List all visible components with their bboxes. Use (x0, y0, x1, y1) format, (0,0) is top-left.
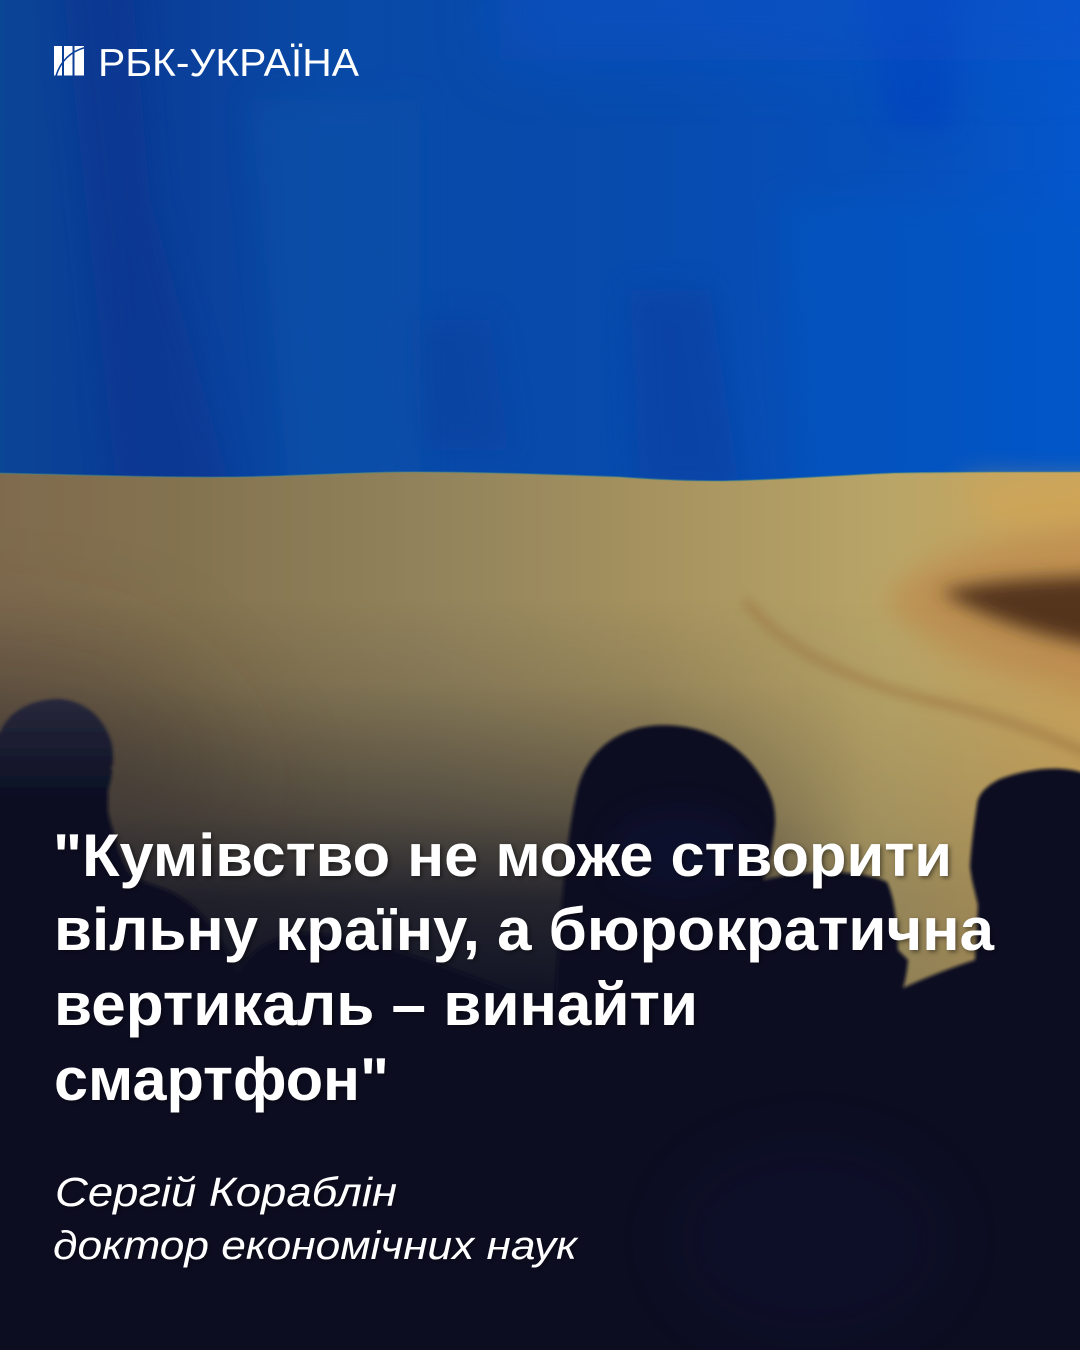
audience silhouettes (0, 699, 1080, 1350)
quote heading: смартфон" (54, 1046, 389, 1113)
author title: доктор економічних наук (53, 1224, 579, 1268)
silhouette: left man (0, 699, 300, 1350)
dark lower gradient (0, 640, 1080, 1010)
quote heading: вільну країну, а бюрократична (54, 896, 995, 963)
silhouette: second row mound (150, 933, 700, 1350)
blue glow on the audience (680, 1150, 940, 1330)
author name: Сергій Кораблін (55, 1169, 397, 1215)
icon: logo mark (54, 46, 85, 76)
left man's head (0, 699, 113, 810)
quote heading (53, 822, 995, 1113)
silhouette: centre person (500, 725, 1000, 1350)
quote heading: вертикаль – винайти (54, 971, 698, 1038)
glasses (111, 767, 118, 771)
background photo: Ukrainian flag (0, 0, 1080, 1004)
flag blue band (0, 0, 1080, 520)
flag yellow band (0, 472, 1080, 1350)
logo wordmark: РБК-УКРАЇНА (98, 42, 359, 85)
quote heading: "Кумівство не може створити (53, 822, 952, 889)
logo: РБК-Україна (54, 42, 359, 85)
silhouette: right person (800, 769, 1080, 1350)
